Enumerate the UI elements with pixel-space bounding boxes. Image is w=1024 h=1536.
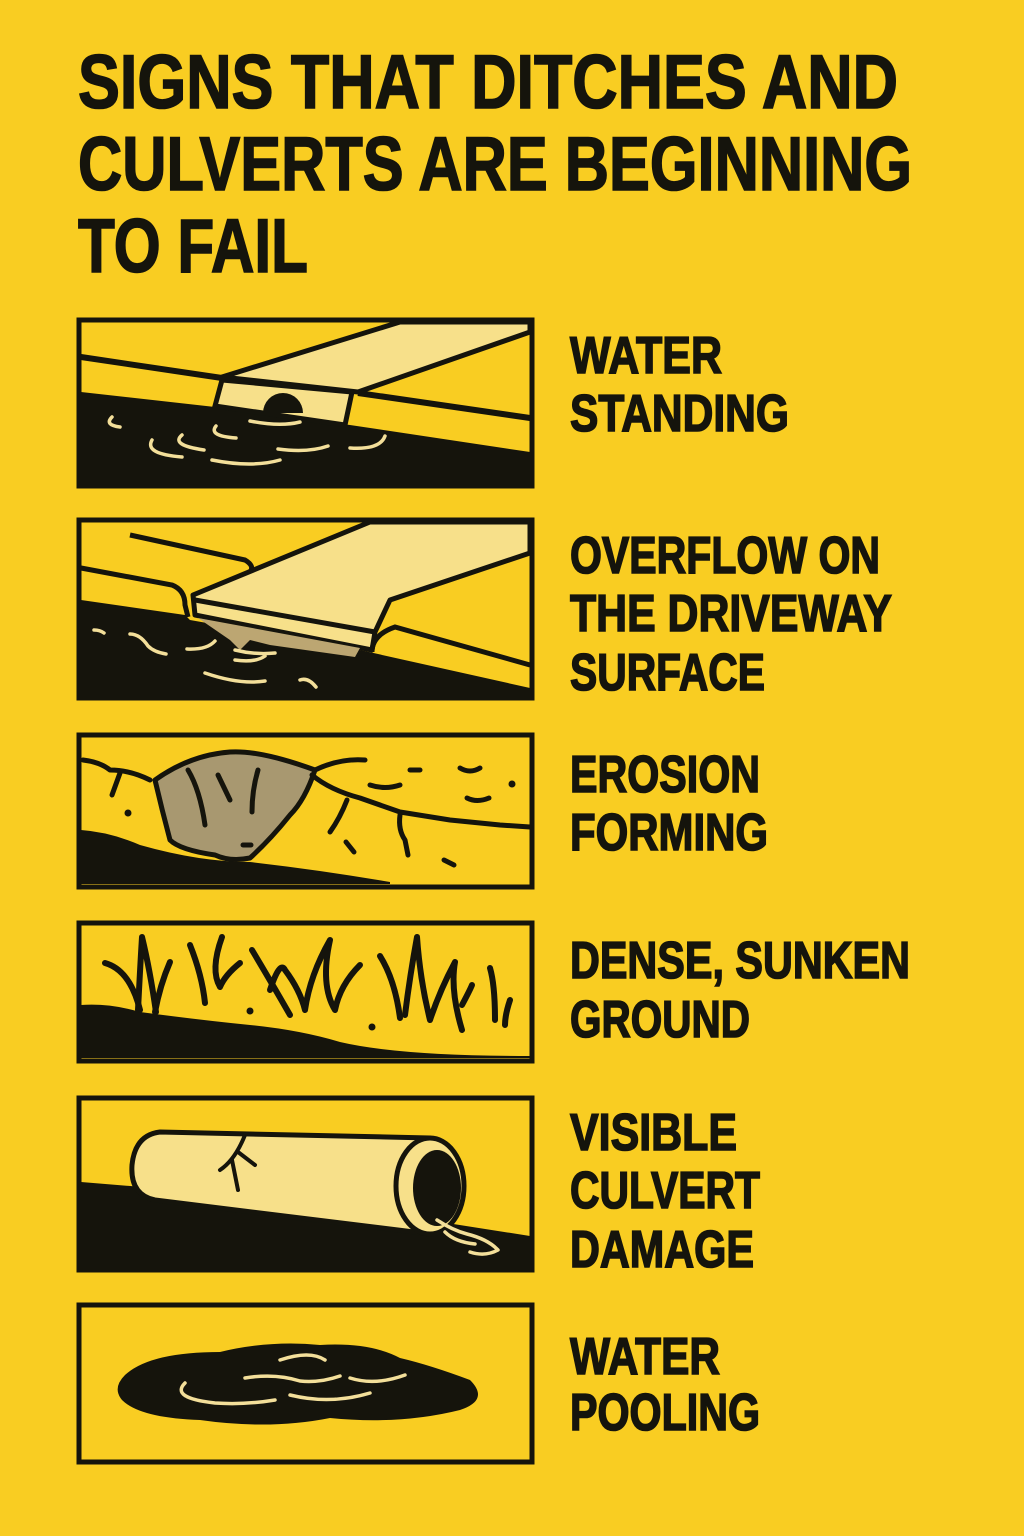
label: culvert damage: CULVERT (570, 1162, 760, 1220)
label: water standing: WATER (570, 327, 722, 385)
title: TO FAIL (78, 204, 308, 289)
label: dense sunken ground (570, 932, 910, 1049)
label: erosion: EROSION (570, 746, 760, 804)
panel: culvert damage (79, 1098, 532, 1270)
label: overflow: SURFACE (570, 644, 765, 702)
panel: erosion (79, 735, 532, 887)
label: water standing (570, 327, 789, 443)
label: water pooling: WATER (570, 1328, 720, 1386)
label: water pooling: POOLING (570, 1384, 760, 1442)
title (78, 40, 912, 289)
label: overflow: THE DRIVEWAY (570, 585, 892, 643)
label: dense sunken ground: DENSE, SUNKEN (570, 932, 910, 990)
label: culvert damage: VISIBLE (570, 1104, 737, 1162)
label: water pooling (570, 1328, 760, 1442)
label: erosion (570, 746, 768, 862)
label: overflow: OVERFLOW ON (570, 527, 880, 585)
label: erosion: FORMING (570, 804, 768, 862)
label: dense sunken ground: GROUND (570, 991, 750, 1049)
label: culvert damage (570, 1104, 760, 1279)
label: culvert damage: DAMAGE (570, 1221, 754, 1279)
panel: water standing (79, 320, 532, 486)
panel: water pooling (79, 1305, 532, 1462)
panel: dense sunken ground (79, 923, 532, 1061)
label: water standing: STANDING (570, 385, 789, 443)
panel: overflow on driveway (79, 520, 532, 698)
label: overflow (570, 527, 892, 702)
